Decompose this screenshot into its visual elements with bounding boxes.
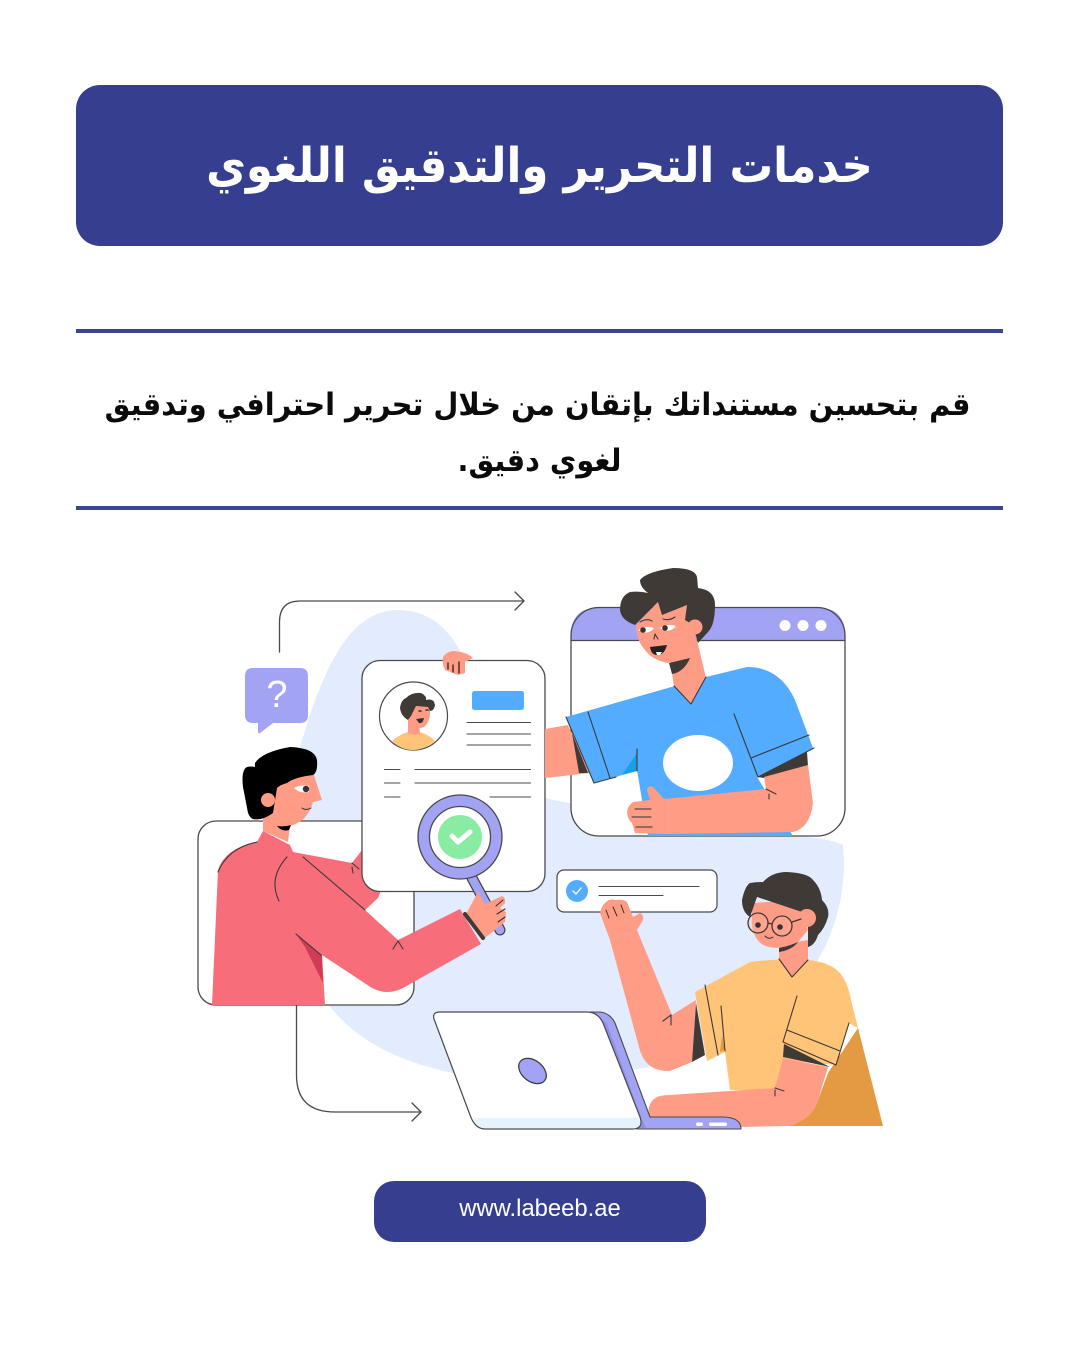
intro text: لغوي دقيق. (457, 443, 621, 479)
top hand on document (443, 651, 473, 675)
left window frame (198, 821, 414, 1005)
shirt emblem (663, 735, 733, 791)
laptop logo (514, 1053, 551, 1089)
raised arm (610, 930, 696, 1071)
speech bubble with question mark (245, 668, 308, 733)
ear (688, 620, 702, 634)
magnifier (418, 795, 502, 930)
intro text: قم بتحسين مستنداتك بإتقان من خلال تحرير احترافي وتدقيق (105, 387, 971, 423)
avatar (380, 682, 448, 750)
neck (779, 940, 808, 977)
shirt fold (296, 934, 323, 983)
sleeve shadow (783, 1044, 830, 1067)
title text: خدمات التحرير والتدقيق اللغوي (206, 138, 873, 194)
right person (545, 568, 814, 836)
back arm and torso (212, 831, 481, 1005)
hair (620, 568, 715, 643)
chair shade (787, 1028, 883, 1126)
glasses (748, 913, 801, 936)
blue tag (472, 691, 524, 710)
laptop screen (434, 1012, 641, 1129)
bottom right person (600, 872, 883, 1127)
head (262, 772, 322, 827)
resume document (362, 660, 545, 892)
chin shadow (779, 942, 798, 952)
raised hand (600, 899, 643, 940)
right window (571, 608, 845, 836)
shirt lines (566, 617, 814, 799)
text lines (384, 722, 530, 797)
laptop base (590, 1012, 741, 1129)
neck (670, 640, 706, 704)
bottom connector arrow (296, 1005, 421, 1121)
shirt lines (218, 842, 403, 955)
face (636, 602, 697, 663)
notification card (557, 870, 717, 912)
hand (627, 786, 665, 834)
neck shadow (277, 825, 291, 830)
eyes (755, 922, 783, 930)
forearm (649, 1058, 828, 1127)
mouth (650, 645, 667, 655)
top connector arrow (280, 592, 524, 652)
left person (212, 747, 481, 1005)
hair (742, 872, 828, 947)
intro text (105, 387, 971, 479)
laptop (434, 1012, 741, 1129)
yellow shirt (695, 959, 858, 1090)
website text: www.labeeb.ae (459, 1195, 621, 1222)
hand holding magnifier (465, 892, 506, 938)
neck (263, 818, 291, 842)
blue shirt (566, 667, 813, 836)
background blob (296, 610, 844, 1080)
eye (294, 785, 309, 792)
website pill (374, 1181, 706, 1242)
ear (261, 793, 275, 807)
shirt lines (663, 959, 849, 1096)
sleeve fold (720, 1035, 725, 1052)
ear (798, 909, 816, 927)
laptop buttons (696, 1122, 703, 1126)
hair (242, 747, 317, 819)
forearm (664, 765, 813, 834)
sleeve shadow (758, 752, 808, 778)
face (752, 900, 808, 948)
title banner (76, 85, 1003, 246)
arm reaching to document (545, 725, 590, 778)
eyes (638, 625, 676, 633)
shirt fold (622, 753, 637, 775)
chin shadow (669, 658, 690, 674)
speech bubble with question mark: ? (266, 674, 288, 716)
